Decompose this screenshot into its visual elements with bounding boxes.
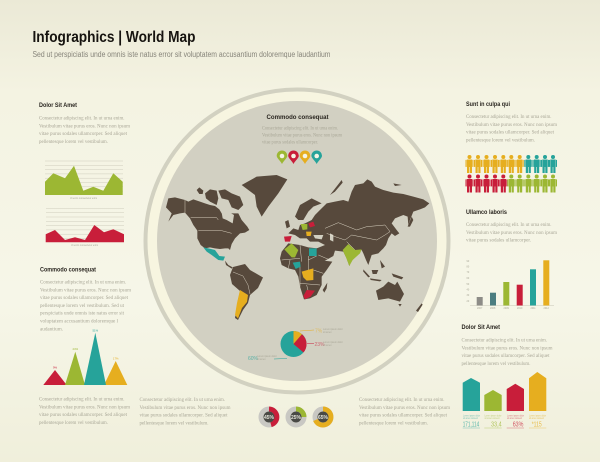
pie chart	[248, 328, 343, 362]
text block: bottom centre-right: Consectetur adipiscing elit. In ut urna enim.	[359, 397, 445, 403]
house bar: yellow: *115	[532, 422, 542, 428]
Belarus	[308, 222, 315, 227]
panel: world map globe	[146, 90, 448, 392]
bar chart	[466, 260, 554, 310]
pie chart: Lorem ipsum dolor	[323, 341, 343, 344]
bar chart: 80	[466, 266, 470, 268]
South America	[230, 264, 263, 320]
heading: Dolor Sit Amet	[462, 324, 501, 331]
subtitle: Sed ut perspiciatis unde omnis iste natus error sit voluptatem accusantium doloremque laudantium	[32, 50, 330, 59]
house bar: green: Lorem ipsum dolor	[484, 414, 502, 418]
bar chart: 2007	[477, 307, 483, 310]
North America	[166, 197, 249, 250]
DR Congo	[302, 268, 313, 281]
pin red	[288, 150, 299, 164]
triangle chart: 24%	[72, 347, 79, 351]
text block: Vestibulum vitae purus eros. Nunc non ipsum	[466, 122, 558, 128]
text block	[40, 280, 132, 332]
triangle chart: 17%	[113, 356, 119, 360]
house bar: yellow: Lorem ipsum dolor	[529, 414, 546, 418]
house bar: red	[507, 384, 524, 428]
text block	[39, 116, 131, 145]
Japan	[408, 217, 413, 227]
house bar: red: sit amet consect	[507, 417, 522, 420]
text block: vitae purus sodales ullamcorper. Sed aliquet	[40, 295, 128, 301]
pie chart: sit amet	[323, 331, 332, 334]
bar chart: 30	[466, 294, 470, 297]
text block: bottom centre-right: Vestibulum vitae purus eros. Nunc non ipsum	[359, 405, 451, 411]
text block	[462, 338, 553, 367]
pie labels: 7%	[315, 328, 323, 334]
Africa	[280, 243, 332, 299]
text block: perspiciatis unde omnis iste natus error sit	[40, 311, 124, 317]
house bar: yellow	[529, 372, 546, 428]
pie chart: Lorem ipsum dolor	[257, 355, 277, 358]
bar chart: 90	[466, 260, 470, 263]
people pictogram	[466, 155, 557, 192]
text block: Vestibulum vitae purus eros. Nunc non ipsum	[40, 287, 132, 293]
Spain	[284, 236, 292, 242]
India	[343, 244, 362, 266]
text block: vitae purus sodales ullamcorper.	[466, 238, 532, 244]
text block: bottom centre-right: pellentesque lorem vel vestibulum.	[359, 420, 429, 426]
text block: bottom left: pellentesque lorem vel vestibulum.	[39, 420, 109, 426]
bar chart: 50	[466, 283, 470, 286]
Nigeria	[293, 262, 301, 269]
text block: Vestibulum vitae purus eros. Nunc non ipsum	[39, 123, 131, 129]
donut green: 25%	[291, 415, 302, 421]
text block: pellentesque lorem vel vestibulum.	[466, 137, 536, 143]
world map	[166, 175, 429, 320]
Madagascar	[323, 283, 327, 293]
Great Britain	[285, 220, 290, 228]
Arctic islands	[197, 187, 243, 210]
Algeria	[284, 243, 298, 257]
text block: Consectetur adipiscing elit. In ut urna enim.	[462, 338, 548, 344]
text block: Consectetur adipiscing elit. In ut urna enim.	[466, 114, 552, 120]
text block: bottom centre-left: Vestibulum vitae purus eros. Nunc non ipsum	[140, 405, 231, 411]
title: Infographics | World Map	[32, 29, 196, 46]
text block: bottom left	[39, 396, 131, 426]
Americas	[166, 175, 287, 269]
text block: Vestibulum vitae purus eros. Nunc non ipsum	[462, 345, 553, 351]
pin teal	[311, 150, 322, 164]
bar chart: 2012	[544, 307, 549, 310]
donut charts	[261, 409, 331, 425]
Romania	[306, 232, 312, 236]
Germany	[301, 224, 307, 230]
area chart: red: Ut enim consectetur enim	[71, 244, 98, 247]
area chart: green: Ut enim consectetur enim	[70, 197, 97, 200]
text block: Consectetur adipiscing elit. In ut urna enim.	[466, 222, 552, 228]
text block: audantium.	[40, 326, 64, 332]
text block: Consectetur adipiscing elit. In ut urna enim.	[39, 116, 125, 122]
Greenland	[242, 175, 287, 217]
bar chart: 20	[466, 300, 470, 303]
bar chart: 70	[466, 271, 470, 274]
text block: Vestibulum vitae purus eros. Nunc non ipsum	[466, 230, 558, 236]
pie chart: sit amet	[257, 358, 266, 361]
text block: bottom centre-left	[140, 397, 231, 426]
people row 1	[466, 155, 557, 173]
Arctic islands	[330, 180, 343, 195]
house bar: green: 33,4	[491, 422, 502, 428]
triangle chart: 9%	[53, 366, 58, 370]
text block: pellentesque lorem vel vestibulum. Sed ut	[40, 303, 124, 309]
text block: voluptatem accusantium doloremque l	[40, 318, 118, 324]
heading: Dolor Sit Amet	[39, 102, 78, 109]
Caspian Sea	[330, 233, 333, 242]
globe disc	[157, 101, 437, 381]
bar chart: 40	[466, 288, 470, 292]
Southeast Asia islands	[363, 260, 403, 281]
panel: bottom right	[462, 324, 553, 428]
Old World	[280, 179, 429, 312]
text block	[466, 222, 558, 244]
text block: vitae purus sodales ullamcorper. Sed aliquet	[39, 131, 127, 137]
text block	[466, 114, 558, 143]
panel: top right	[466, 101, 558, 192]
map pins	[277, 150, 322, 164]
Eurasia	[288, 179, 429, 266]
panel: top left	[39, 102, 131, 247]
bar chart: 2011	[530, 307, 536, 310]
house bar: teal: Lorem ipsum dolor	[463, 414, 480, 418]
donut yellow: 65%	[318, 415, 329, 421]
house bar: yellow: sit amet consect	[529, 417, 544, 420]
pie leader lines	[300, 330, 314, 331]
South America borders	[233, 272, 250, 294]
Black Sea	[313, 235, 323, 239]
bar chart: 2008	[490, 307, 496, 310]
house bar: red: Lorem ipsum dolor	[507, 414, 524, 418]
Hudson Bay	[222, 212, 234, 223]
heading: Commodo consequat	[40, 266, 97, 274]
text block: bottom centre-left: vitae purus sodales ullamcorper. Sed aliquet	[140, 413, 228, 419]
donut red: 45%	[264, 415, 275, 421]
pin yellow	[300, 150, 310, 164]
area chart: red	[46, 208, 124, 247]
New Zealand	[416, 303, 423, 312]
Mexico	[203, 247, 225, 261]
North America borders	[184, 200, 186, 213]
globe outer ring	[146, 90, 448, 392]
house bar: green	[484, 390, 502, 428]
Central America	[225, 261, 233, 269]
area chart: green	[45, 161, 123, 200]
people row 2	[466, 174, 557, 192]
panel: right middle	[466, 209, 558, 310]
text block: vitae purus sodales ullamcorper. Sed aliquet	[466, 130, 554, 136]
text block: bottom left: Consectetur adipiscing elit. In ut urna enim.	[39, 396, 125, 402]
text block: bottom centre-right	[359, 397, 451, 426]
house bar: teal	[463, 378, 480, 428]
text block: bottom left: Vestibulum vitae purus eros. Nunc non ipsum	[39, 404, 131, 410]
Asia and Africa borders	[282, 223, 390, 292]
bar chart: 2010	[517, 307, 523, 310]
triangle chart: 51%	[92, 328, 99, 332]
Tasmania	[398, 304, 402, 307]
map panel text: vitae purus sodales ullamcorper.	[262, 140, 318, 146]
heading: Sunt in culpa qui	[466, 101, 510, 108]
Scandinavia	[295, 198, 322, 220]
map panel text: Vestibulum vitae purus eros. Nunc non ipsum	[262, 132, 343, 138]
map panel text	[262, 126, 343, 146]
house bar: teal: sit amet consect	[463, 417, 478, 420]
bar chart: 60	[466, 277, 470, 280]
pie chart: 23%	[314, 342, 325, 348]
Argentina	[235, 290, 248, 318]
text block: vitae purus sodales ullamcorper. Sed aliquet	[462, 353, 550, 359]
text block: bottom left: vitae purus sodales ullamcorper. Sed aliquet	[39, 412, 127, 418]
text block: pellentesque lorem vel vestibulum.	[39, 139, 109, 145]
South Africa	[303, 290, 315, 299]
house bar: green: sit amet consect	[484, 417, 500, 420]
text block: bottom centre-left: pellentesque lorem vel vestibulum.	[140, 420, 209, 426]
text block: bottom centre-left: Consectetur adipiscing elit. In ut urna enim.	[140, 397, 226, 403]
text block: Consectetur adipiscing elit. In ut urna enim.	[40, 280, 127, 286]
map panel heading: Commodo consequat	[266, 114, 329, 121]
pin green	[277, 150, 287, 164]
map panel text: Consectetur adipiscing elit. In ut urna enim.	[262, 126, 338, 132]
pie chart: Lorem ipsum dolor	[323, 328, 343, 331]
pie chart: 60%	[248, 356, 259, 362]
bar chart: 2009	[504, 307, 509, 310]
Australia	[376, 282, 404, 302]
house bar: red: 63%	[513, 422, 523, 428]
heading: Ullamco laboris	[466, 209, 507, 216]
pie chart: sit amet	[323, 344, 332, 347]
text block: pellentesque lorem vel vestibulum.	[462, 361, 531, 367]
triangle chart	[43, 328, 127, 385]
house bar: teal: 171,114	[463, 422, 479, 428]
panel: left middle	[40, 266, 132, 385]
Egypt	[309, 248, 317, 256]
text block: bottom centre-right: vitae purus sodales ullamcorper. Sed aliquet	[359, 413, 447, 419]
